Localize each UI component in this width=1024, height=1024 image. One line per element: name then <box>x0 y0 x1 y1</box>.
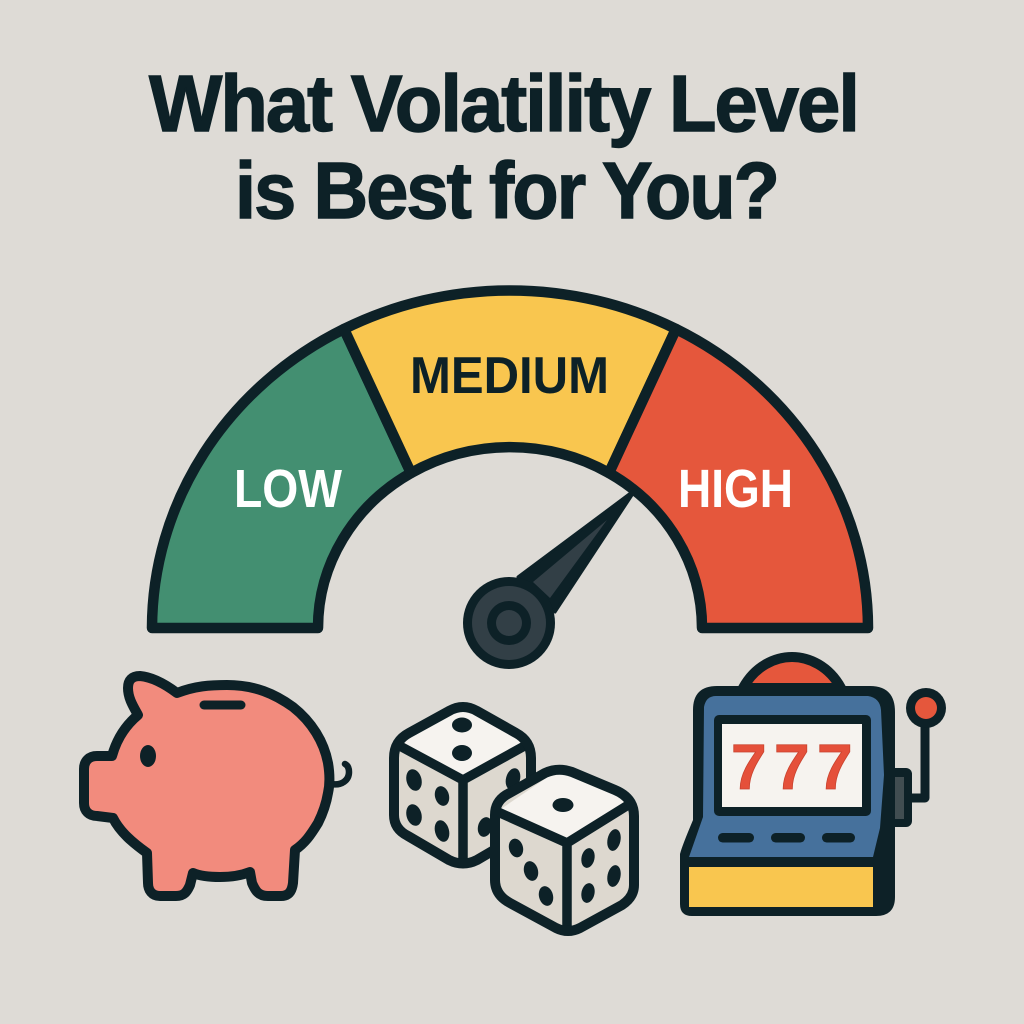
gauge segment: low <box>152 329 411 628</box>
back die <box>394 706 531 864</box>
lever <box>888 688 946 827</box>
title: is Best for You? <box>235 146 778 235</box>
icon: dice <box>394 706 634 931</box>
gauge needle <box>463 489 636 669</box>
gauge segment: high <box>609 329 868 628</box>
gauge segment: medium: MEDIUM <box>410 347 609 405</box>
coin tray <box>689 867 873 907</box>
screen <box>714 715 871 816</box>
buttons <box>718 833 855 842</box>
title <box>149 59 858 235</box>
dome <box>743 657 841 688</box>
volatility gauge <box>152 290 868 628</box>
gauge segment: medium <box>344 290 676 473</box>
gauge segment: high: HIGH <box>678 459 793 519</box>
cabinet <box>680 686 895 916</box>
icon: piggy bank <box>84 676 349 896</box>
screen: 777 <box>731 731 853 803</box>
icon: slot machine <box>680 657 946 916</box>
gauge segment: low: LOW <box>234 459 342 519</box>
front die <box>495 770 634 931</box>
title: What Volatility Level <box>149 59 858 148</box>
